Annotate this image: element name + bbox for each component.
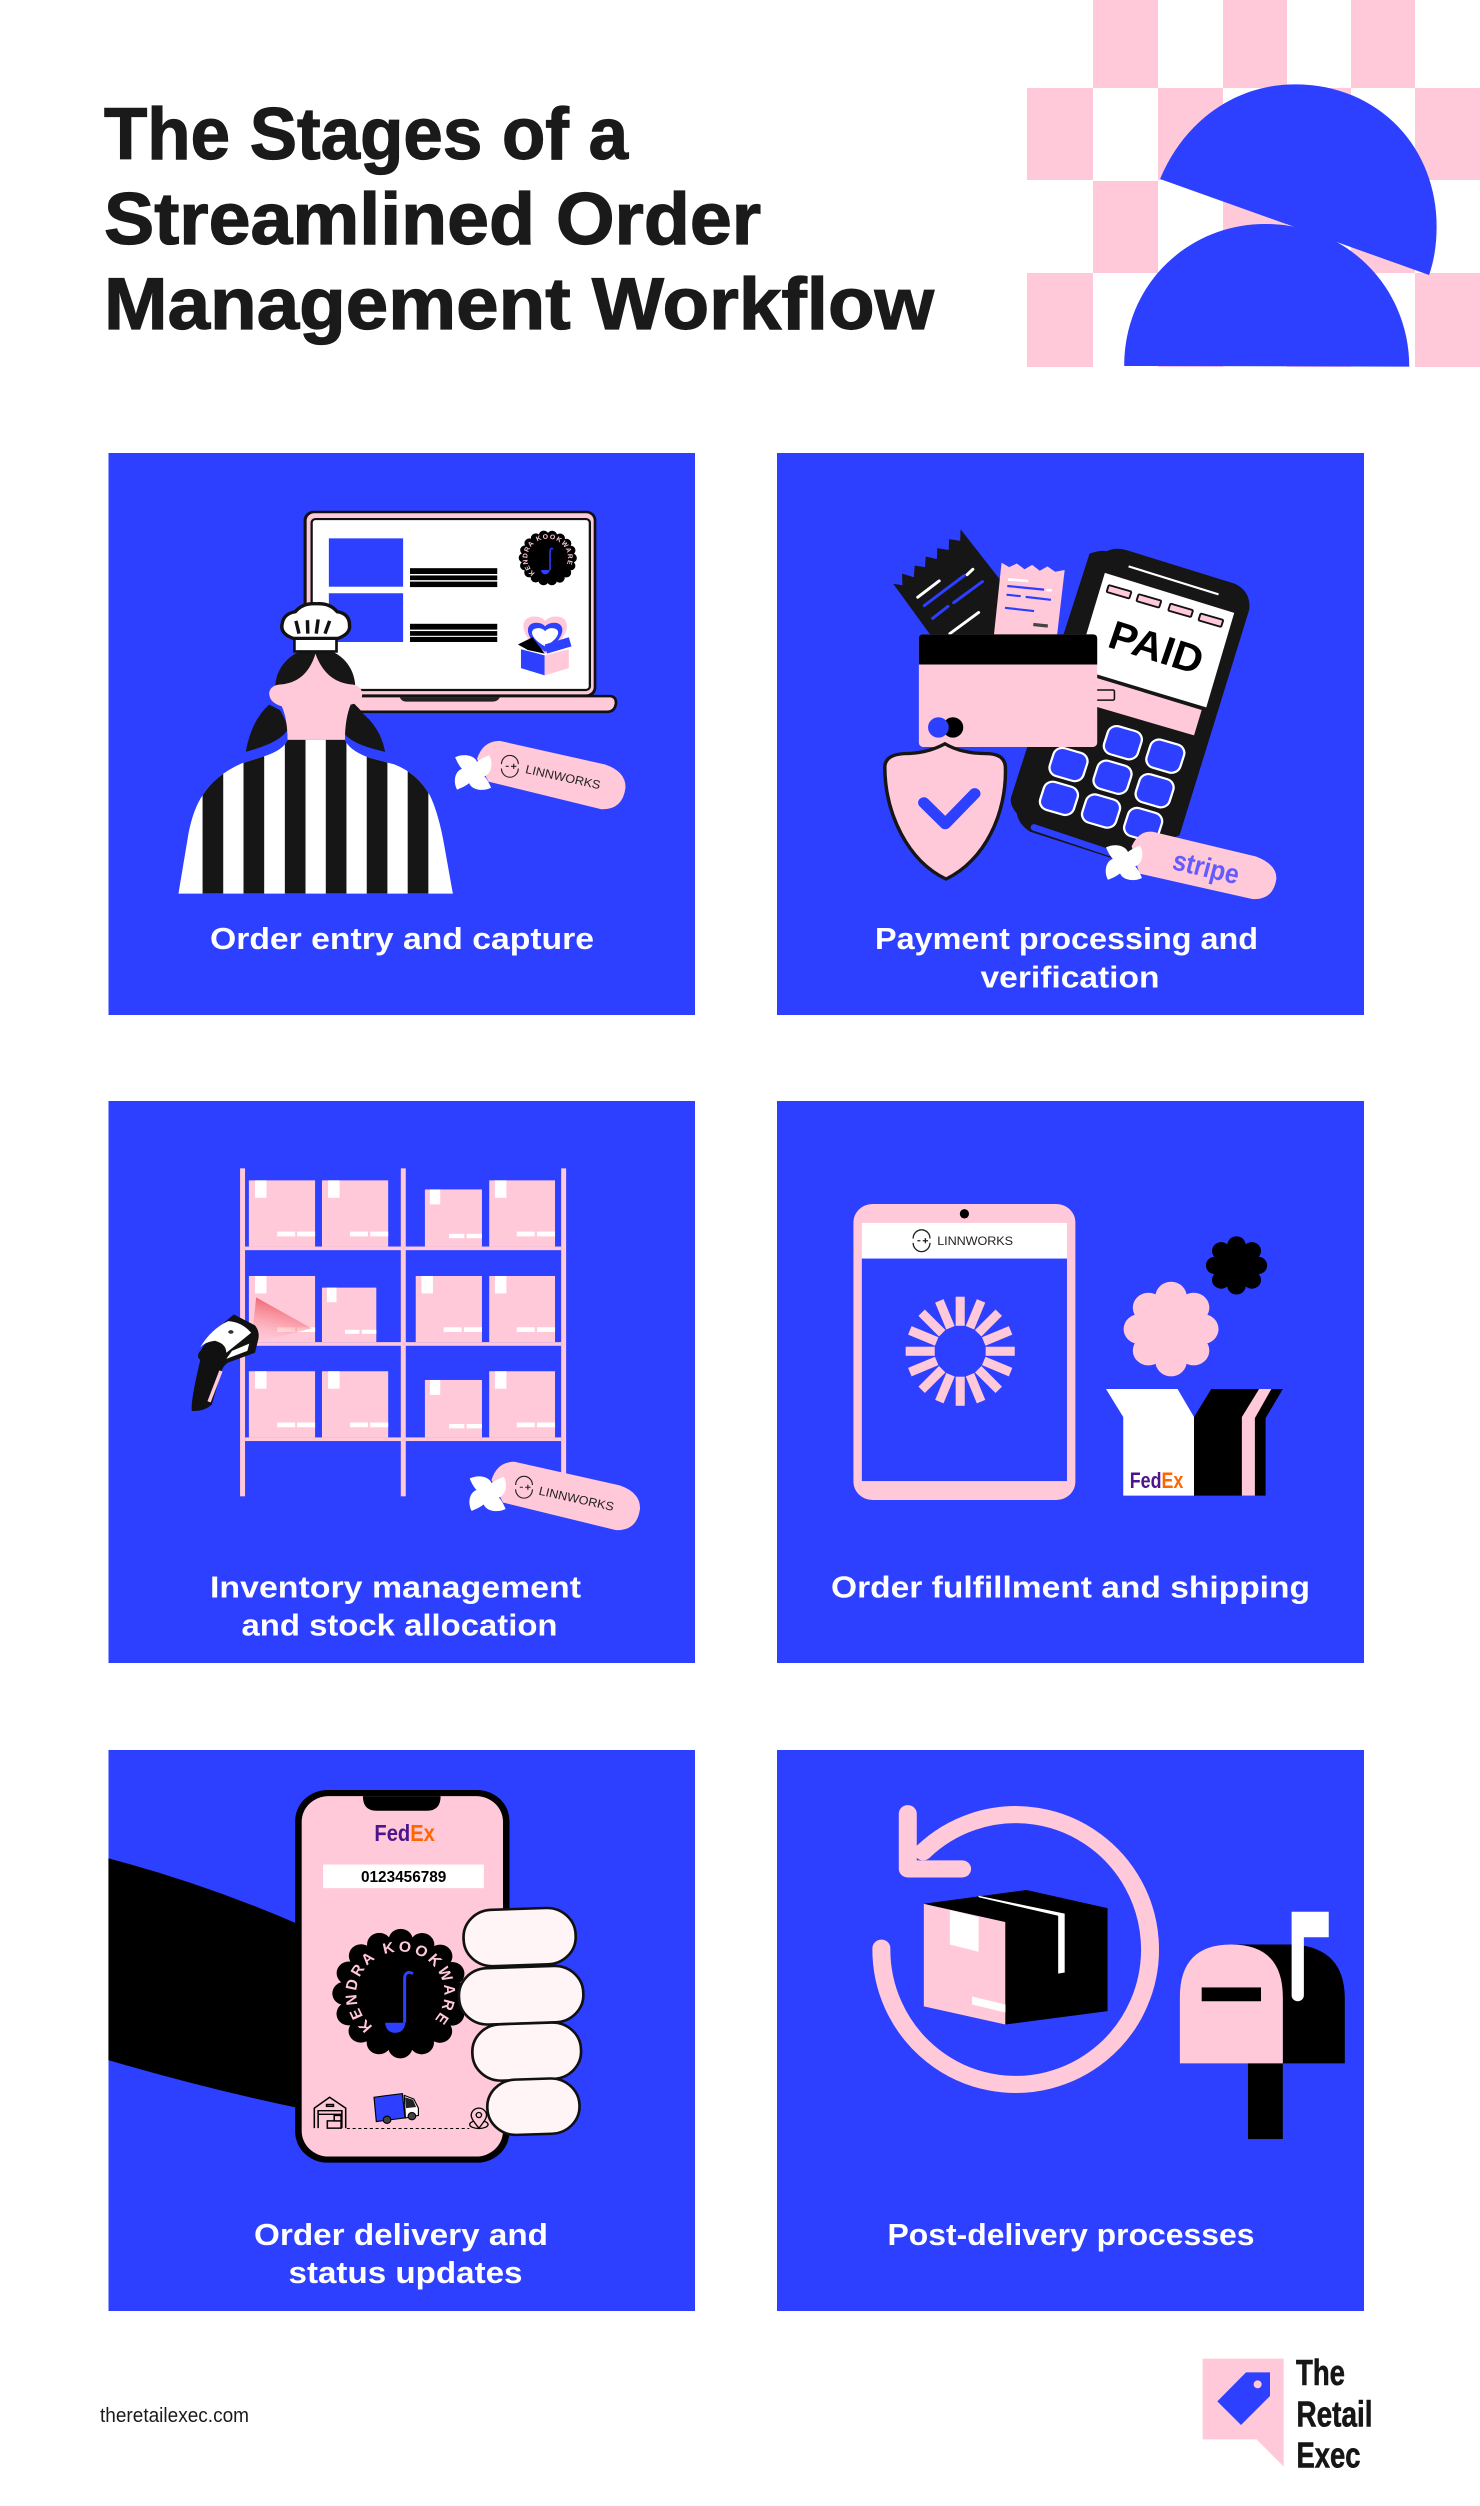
icon: price tag	[1203, 2359, 1284, 2467]
icon: parcel	[924, 1890, 1108, 2025]
caption: Payment processing and	[875, 921, 1258, 956]
icon: location pin	[470, 2108, 488, 2129]
illustration: laptop and chef	[178, 510, 626, 894]
icon: Kendra Kookware badge	[332, 1928, 464, 2058]
wordmark	[1296, 2352, 1372, 2476]
caption: Order entry and capture	[210, 921, 594, 956]
wordmark: Exec	[1296, 2434, 1360, 2476]
icon: Linnworks tag	[469, 1462, 640, 1530]
icon: phone: FedEx	[374, 1820, 435, 1847]
logo: The Retail Exec	[1203, 2352, 1372, 2476]
header decoration: checkerboard and blue shapes	[1027, 0, 1480, 367]
shelving unit	[240, 1168, 566, 1496]
icon: loading spinner	[906, 1297, 1015, 1406]
icon: shield with check	[885, 744, 1005, 879]
illustration: phone in hand	[108, 1790, 585, 2163]
icon: phone	[295, 1790, 509, 2163]
icon: Linnworks tag: LINNWORKS	[524, 762, 602, 792]
icon: payment terminal	[1011, 549, 1249, 859]
icon: Stripe tag: stripe	[1169, 845, 1243, 891]
icon: barcode scanner	[192, 1315, 259, 1411]
caption	[254, 2217, 548, 2290]
caption: Inventory management	[210, 1570, 581, 1604]
icon: payment terminal: PAID	[1103, 612, 1209, 683]
icon: open parcel: FedEx	[1130, 1468, 1184, 1493]
icon: pink flower	[1124, 1282, 1219, 1376]
icon: woman in chef hat	[178, 604, 453, 897]
icon: open parcel	[1106, 1389, 1283, 1496]
title: The Stages of a	[104, 94, 629, 175]
title	[104, 94, 934, 345]
dotted route	[347, 2127, 469, 2130]
icon: black flower	[1206, 1236, 1267, 1295]
illustration: shelves and scanner	[192, 1168, 640, 1530]
icon: Kendra Kookware badge	[518, 530, 577, 586]
icon: gift box with heart	[518, 617, 571, 675]
icon: Linnworks tag	[455, 741, 625, 809]
icon: Stripe tag	[1106, 832, 1276, 899]
icon: fingers	[458, 1907, 584, 2136]
delivery tracker	[314, 2094, 488, 2129]
scanner beam	[251, 1297, 312, 1344]
panel: post-delivery processes	[777, 1750, 1364, 2311]
icon: Kendra Kookware badge: KENDRA KOOKWARE	[346, 1941, 456, 2033]
icon: phone: 0123456789	[361, 1869, 447, 1886]
caption: Order fulfillment and shipping	[831, 1570, 1310, 1604]
title: Streamlined Order	[104, 179, 761, 260]
boxes on shelves	[249, 1180, 555, 1437]
caption: Post-delivery processes	[888, 2217, 1254, 2252]
icon: Linnworks tag: LINNWORKS	[537, 1484, 615, 1514]
icon: Kendra Kookware badge: KENDRA KOOKWARE	[522, 534, 573, 576]
caption: and stock allocation	[242, 1608, 558, 1642]
icon: credit card	[919, 634, 1097, 747]
icon: return arrow	[881, 1814, 1150, 2084]
icon: tablet: LINNWORKS	[937, 1234, 1013, 1248]
icon: black receipt	[893, 529, 1000, 635]
footer url: theretailexec.com	[100, 2405, 249, 2427]
icon: mailbox	[1180, 1912, 1345, 2139]
caption	[875, 921, 1258, 994]
wordmark: The	[1296, 2352, 1345, 2393]
illustration: tablet and parcel	[853, 1204, 1283, 1500]
panel: order fulfillment and shipping	[777, 1101, 1364, 1663]
icon: laptop	[304, 511, 616, 712]
panel: order entry and capture	[108, 453, 695, 1015]
panel: order delivery and status updates	[108, 1750, 695, 2311]
illustration: card terminal	[885, 529, 1276, 899]
title: Management Workflow	[104, 264, 934, 345]
icon: tablet	[853, 1204, 1075, 1500]
panel: inventory management and stock allocation	[108, 1101, 695, 1663]
panel: payment processing and verification	[777, 453, 1364, 1015]
caption: Order delivery and	[254, 2217, 548, 2252]
wordmark: Retail	[1296, 2394, 1372, 2434]
caption: status updates	[288, 2255, 522, 2290]
arm sleeve	[108, 1858, 299, 2108]
icon: pink receipt	[994, 563, 1065, 635]
caption	[210, 1570, 581, 1642]
icon: delivery truck	[374, 2094, 418, 2123]
illustration: returns and mailbox	[881, 1814, 1345, 2139]
caption: verification	[980, 960, 1160, 994]
icon: warehouse	[314, 2097, 346, 2128]
